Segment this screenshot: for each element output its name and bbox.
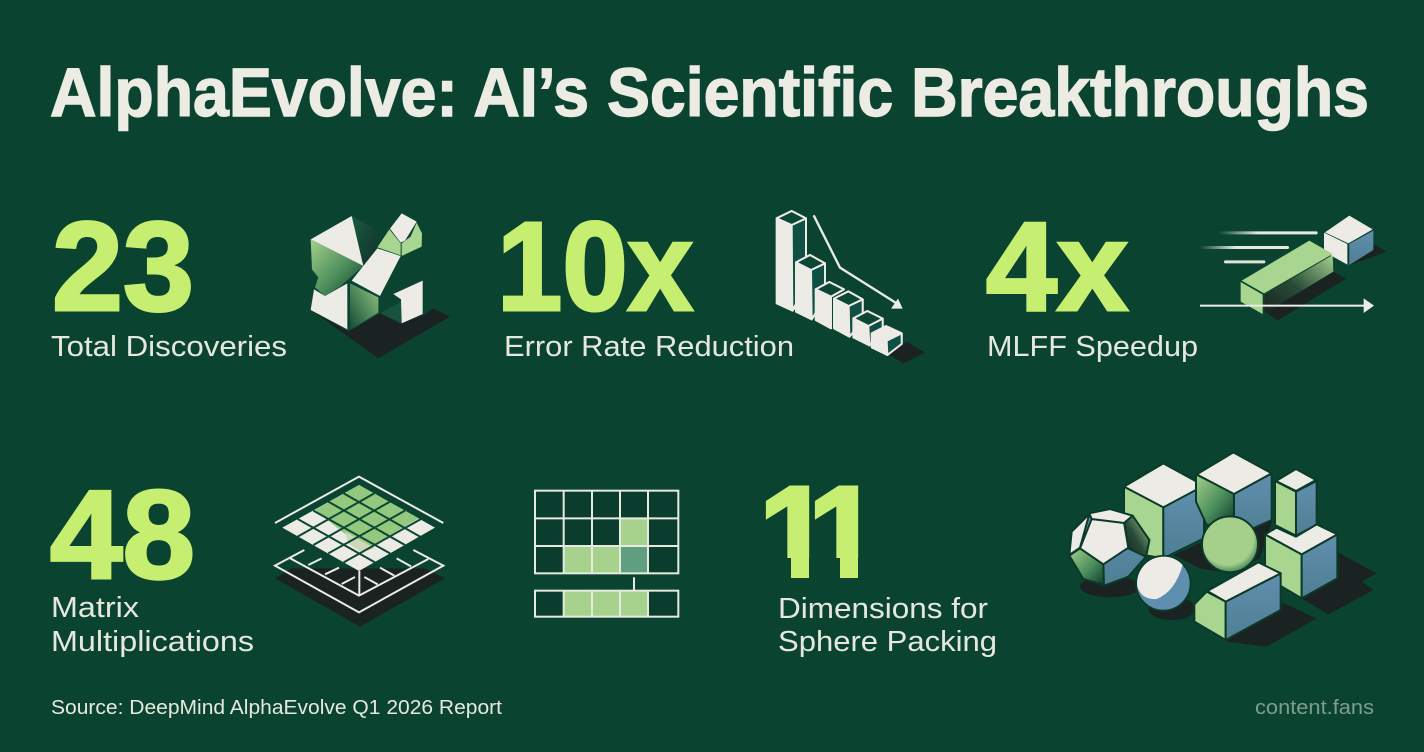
stat: 11 dimensions for sphere packing <box>766 486 995 657</box>
icon: stacked matrix layers <box>275 477 445 627</box>
brand mark: content.fans <box>1255 697 1374 719</box>
stat: 10x error rate reduction <box>497 196 794 363</box>
icon: moving block with speed lines <box>1200 216 1387 321</box>
number: 4x: 4x <box>986 196 1128 337</box>
icon: packed 3D solids <box>1069 452 1377 647</box>
stat: 48 matrix multiplications <box>50 464 254 658</box>
label: error rate reduction: Error Rate Reduction <box>504 331 794 363</box>
stat: 23 total discoveries <box>51 196 287 363</box>
icon: flat matrix grid <box>535 491 678 617</box>
label: matrix multiplications: Matrix <box>51 592 140 624</box>
number: 11: 11 <box>759 459 880 605</box>
label: dimensions for sphere packing: Dimensions for <box>778 593 988 625</box>
number: 10x: 10x <box>497 196 693 337</box>
source note: Source: DeepMind AlphaEvolve Q1 2026 Report <box>51 697 502 719</box>
stat: 11 dimensions for sphere packing: Sphere Packing <box>778 626 997 658</box>
icon: descending bars with arrow <box>777 211 925 363</box>
label: total discoveries: Total Discoveries <box>51 331 287 363</box>
label: MLFF speedup: MLFF Speedup <box>987 331 1198 363</box>
stat: 48 matrix multiplications: Multiplications <box>51 626 254 658</box>
title: AlphaEvolve: AI’s Scientific Breakthroughs <box>50 54 1369 131</box>
number: 23: 23 <box>52 196 194 337</box>
icon: broken geometric shape <box>311 213 450 358</box>
stat: 4x MLFF speedup <box>986 196 1198 363</box>
number: 48: 48 <box>50 464 195 605</box>
